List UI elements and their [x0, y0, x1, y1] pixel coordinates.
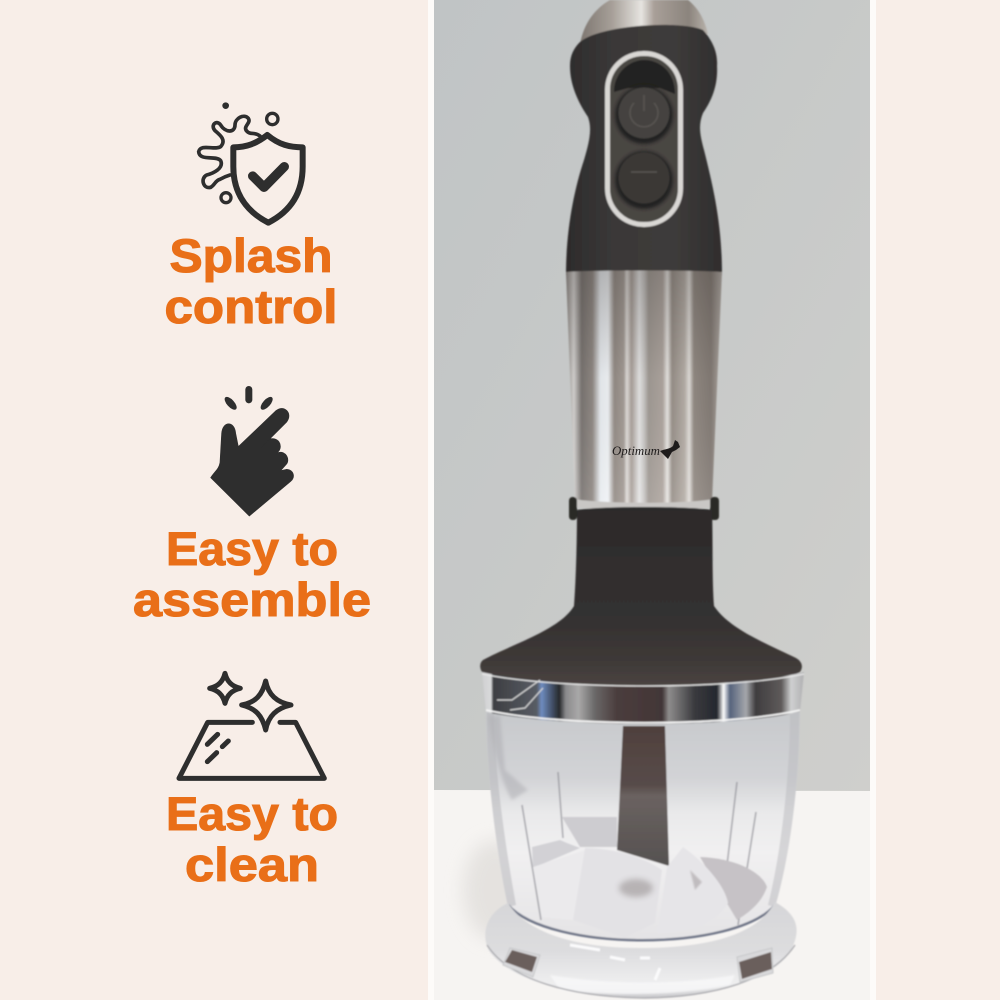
wall background	[434, 0, 870, 795]
label: assemble: assemble	[133, 573, 371, 626]
silver button surround	[608, 54, 680, 224]
right ice shading	[690, 870, 702, 890]
right screw	[710, 497, 719, 520]
chrome ring diagonal marks	[497, 680, 543, 710]
label: control: control	[164, 280, 338, 333]
feature: splash control	[164, 102, 338, 333]
left clip bar	[505, 950, 537, 972]
label: splash: Splash	[170, 229, 332, 282]
tap rays	[245, 386, 252, 403]
feature: easy to clean	[166, 673, 338, 891]
jar right shade	[768, 712, 799, 907]
icon: sparkling clean surface	[179, 673, 324, 778]
splash outline	[199, 116, 260, 188]
jar shadow on counter	[462, 840, 507, 936]
right ice cube	[668, 848, 728, 904]
power symbol	[630, 95, 658, 127]
black handle	[566, 25, 722, 275]
small left ice	[532, 840, 580, 868]
chrome ring	[482, 672, 804, 724]
steel top cap	[580, 0, 708, 44]
small sparkle	[210, 673, 240, 703]
left screw	[569, 497, 577, 520]
stainless steel body	[566, 270, 722, 508]
surface	[179, 722, 324, 778]
base outer edge	[487, 945, 795, 998]
speed button	[618, 152, 670, 204]
glass jar	[490, 725, 796, 938]
white counter	[434, 790, 870, 795]
left base clip	[503, 948, 540, 977]
panel: product photo of hand blender	[434, 0, 870, 1000]
minus symbol	[631, 171, 657, 173]
jar ribs	[522, 772, 756, 925]
base highlight	[550, 975, 735, 994]
base glints	[570, 945, 660, 980]
right base clip	[737, 948, 773, 982]
hand	[211, 408, 293, 516]
centre ice cube	[579, 848, 662, 895]
brand name: Optimum	[612, 443, 660, 458]
blender	[480, 0, 804, 998]
brand logo	[612, 440, 680, 459]
ice cubes	[532, 816, 768, 920]
left ice cube	[533, 866, 535, 868]
jar left reflection	[492, 716, 527, 800]
jar left shade	[487, 712, 516, 907]
power button	[618, 88, 670, 138]
power button shadow	[615, 86, 673, 144]
kangaroo	[660, 440, 680, 459]
shine lines	[207, 734, 228, 762]
right floor shadow	[700, 857, 767, 920]
black collar and lid	[480, 507, 802, 687]
icon: tapping hand	[211, 386, 293, 516]
check mark	[253, 167, 284, 187]
blade shaft	[617, 726, 669, 866]
speed button shadow	[615, 151, 673, 209]
shield	[233, 135, 303, 223]
splash droplet bottom	[221, 193, 231, 203]
large sparkle	[242, 681, 291, 730]
splash droplet top	[267, 113, 278, 125]
label: clean: clean	[185, 838, 319, 891]
white frame around photo	[428, 0, 876, 1000]
jar base	[485, 902, 797, 998]
splash dot	[222, 102, 229, 109]
chrome ring lower line	[486, 710, 800, 723]
right clip bar	[739, 952, 772, 979]
chrome ring top edge	[482, 674, 804, 686]
label: easy to: Easy to	[166, 522, 338, 575]
centre ice shadow	[619, 879, 653, 897]
steel lower band	[575, 499, 712, 510]
label: easy to: Easy to	[166, 787, 338, 840]
steel vertical shading	[566, 270, 722, 508]
button panel	[608, 54, 680, 224]
icon: shield with splash	[199, 102, 303, 223]
back ice cube	[562, 817, 617, 847]
top dark recess	[614, 60, 675, 94]
jar bottom blue rim	[508, 905, 775, 940]
feature: easy to assemble	[133, 386, 371, 626]
